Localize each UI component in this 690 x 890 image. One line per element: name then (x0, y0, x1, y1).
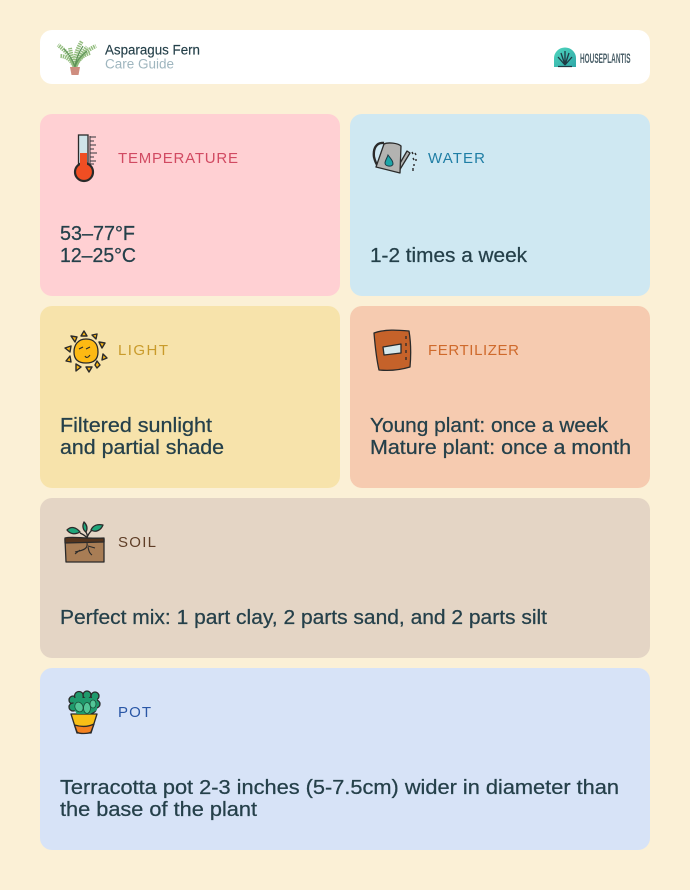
temperature values: 53–77°F (60, 223, 135, 245)
panel: pot (40, 668, 650, 850)
panel: soil (40, 498, 650, 658)
icon: potted plant (69, 691, 100, 734)
label: fertilizer: FERTILIZER (428, 342, 519, 359)
icon: thermometer (75, 135, 97, 181)
fertilizer schedule: Mature plant: once a month (370, 437, 631, 459)
fertilizer schedule (370, 415, 631, 459)
label: water: WATER (428, 150, 485, 167)
header subtitle: Care Guide (105, 56, 174, 72)
icon: soil with seedling (65, 522, 104, 562)
temperature values (60, 223, 136, 267)
header bar: HOUSEPLANTIS (580, 51, 630, 66)
icon: watering can (374, 143, 416, 173)
panel: light (40, 306, 340, 488)
icon: asparagus fern in pot (58, 41, 96, 75)
icon: fertilizer bag (374, 330, 411, 370)
light description: Filtered sunlight (60, 415, 212, 437)
panel: temperature (40, 114, 340, 296)
pot description: Terracotta pot 2-3 inches (5-7.5cm) wider in diameter than (60, 777, 619, 799)
water frequency: 1-2 times a week (370, 245, 528, 267)
header bar (40, 30, 650, 84)
soil description: Perfect mix: 1 part clay, 2 parts sand, and 2 parts silt (60, 607, 547, 629)
label: temperature: TEMPERATURE (118, 150, 238, 167)
icon: sun (65, 331, 107, 372)
header title: Asparagus Fern (105, 42, 200, 58)
pot description: the base of the plant (60, 799, 257, 821)
fertilizer schedule: Young plant: once a week (370, 415, 609, 437)
pot description (60, 777, 619, 821)
label: pot: POT (118, 704, 151, 721)
light description (60, 415, 224, 459)
temperature values: 12–25°C (60, 245, 136, 267)
panel: water (350, 114, 650, 296)
logo: Houseplantis (554, 48, 630, 67)
panel: fertilizer (350, 306, 650, 488)
label: light: LIGHT (118, 342, 168, 359)
label: soil: SOIL (118, 534, 156, 551)
light description: and partial shade (60, 437, 224, 459)
